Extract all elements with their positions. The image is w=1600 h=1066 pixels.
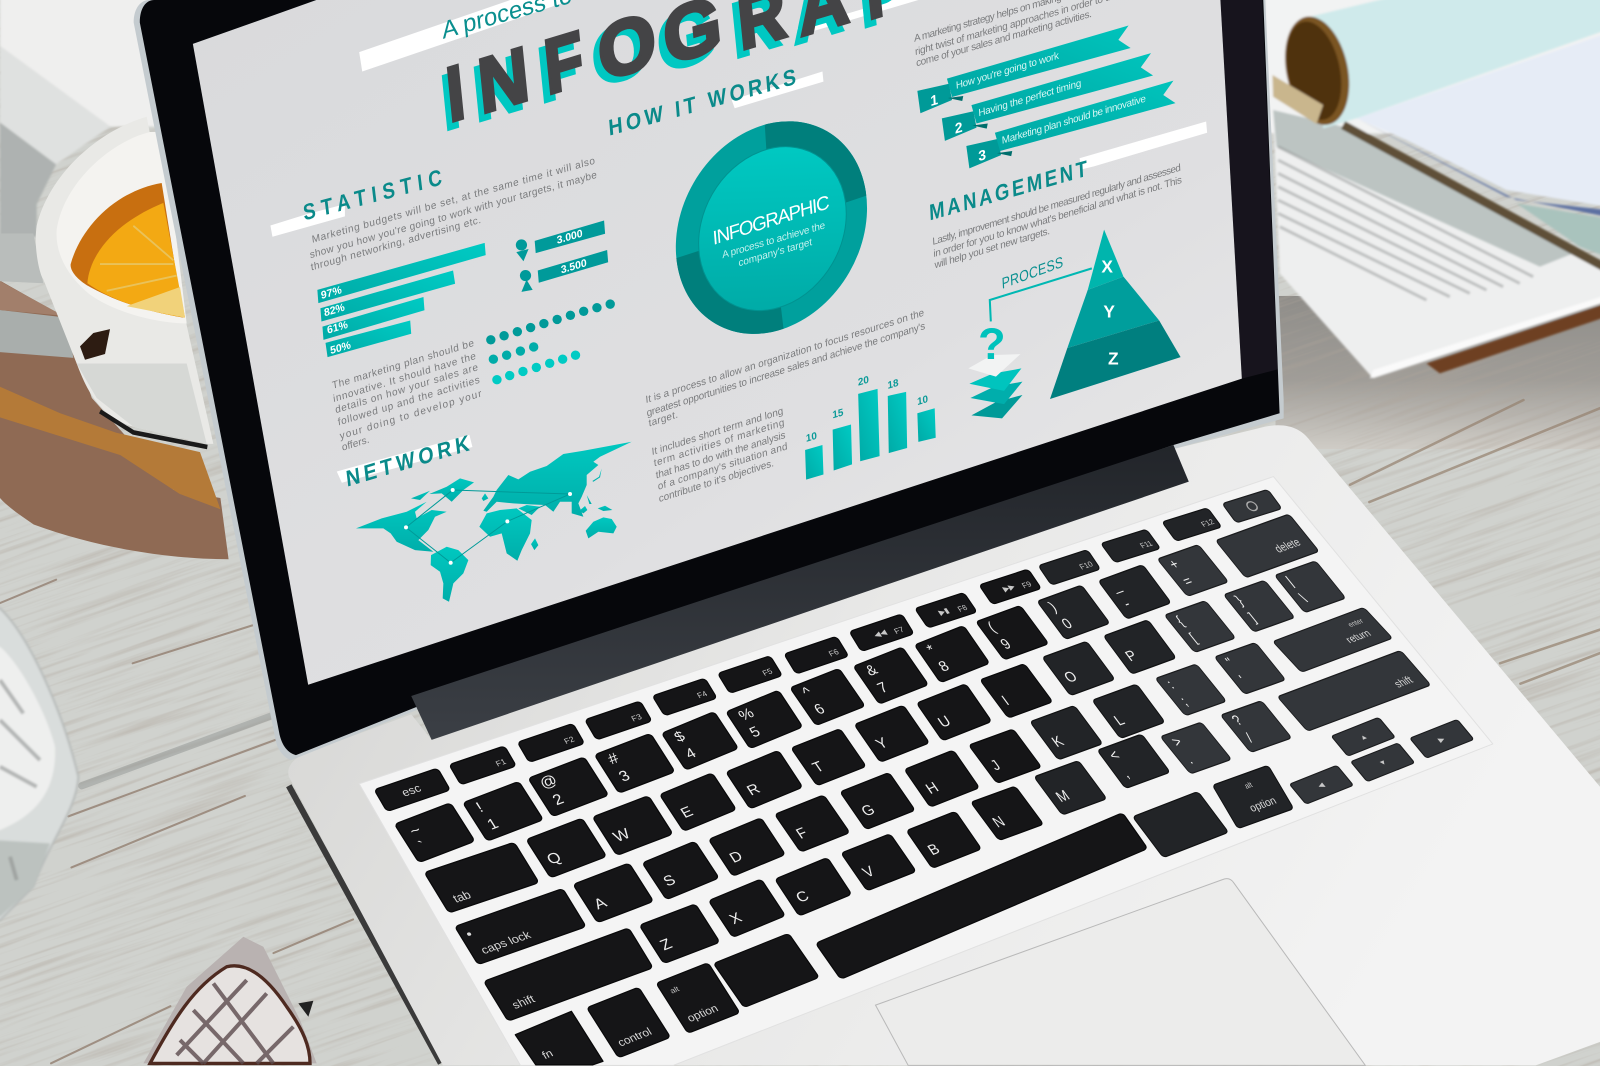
keyboard [374,489,1474,1065]
bottom key row [515,765,1294,1065]
number key row: ( [985,620,999,636]
rolled paper and notebook [1265,0,1600,378]
function key row: F4 [695,689,709,700]
ribbon 1: 1 [930,92,939,110]
lower letter key row: < [1106,747,1124,764]
qwerty key row: O [1061,669,1081,686]
number key row: 9 [998,636,1015,653]
lower letter key row: Z [657,936,676,954]
lower letter key row: ? [1229,713,1246,729]
center circle graphic [676,121,868,334]
number key row: 8 [936,659,953,675]
number key row: _ [1106,578,1125,595]
function key row: ◀◀ [872,628,889,640]
function key row: F3 [630,712,644,723]
center paragraphs: It is a process to allow an organization to focus resources on the [645,307,925,406]
center paragraphs: that has to do with the analysis [655,430,786,482]
number key row: 0 [1059,616,1076,633]
function key row: F7 [892,625,906,636]
marketing plan paragraph: offers. [341,435,370,454]
arrow keys: ▼ [1377,758,1389,767]
bar chart: 20 [858,375,870,389]
title: INFOGRAPHIC: F [534,24,581,120]
title: INFOGRAPHIC: N [469,38,528,138]
home key row: enter [1345,616,1366,629]
function key row: esc [399,781,424,799]
ribbon 3: Marketing plan should be innovative [1002,93,1147,147]
world map [356,442,632,602]
number key row: 3 [616,768,634,785]
function key row [374,489,1282,812]
cup of tea with lemon [0,117,213,447]
number key row: 1 [484,816,502,833]
management paragraph: Lastly, improvement should be measured regularly and assessed [932,162,1181,248]
number key row: 5 [747,724,764,741]
arrow keys [1289,717,1474,804]
number key row: ~ [407,822,424,840]
home key row: S [660,872,679,890]
qwerty key row: | [1283,574,1297,589]
space bar [816,813,1148,979]
qwerty key row: ] [1245,610,1260,626]
wooden spoon [0,387,220,509]
home key row: " [1223,655,1238,671]
marketing plan paragraph: followed up and the activities [337,375,480,429]
bottom key row: alt [1243,780,1254,791]
lower letter key row: , [1119,766,1133,782]
icon: male with value 3.500 [520,250,608,292]
laptop lid and bezel [134,0,1284,760]
number key row: ` [416,839,430,855]
marketing plan paragraph [332,338,483,454]
icon: question mark with stacked layers [968,318,1022,418]
pyramid X Y Z: Z [1108,348,1119,368]
center circle graphic: company's target [738,237,813,269]
home key row: H [923,780,942,798]
heading: management: MANAGEMENT [929,156,1088,226]
qwerty key row: P [1122,648,1141,665]
number key row: ^ [800,685,815,701]
bottom key row: option [685,1003,721,1025]
laptop base [288,425,1600,1065]
drinking glass [0,608,78,920]
number key row: 7 [875,680,892,697]
arrow keys: ◀ [1315,781,1327,790]
home key row: ; [1177,694,1192,709]
management paragraph: will help you set new targets. [933,226,1050,272]
percentage bars: 82% [323,301,346,319]
qwerty key row: Q [544,850,565,868]
home key row: A [591,895,610,913]
circle label: INFOGRAPHIC [712,191,830,250]
lower letter key row: . [1182,752,1197,768]
marketing plan paragraph: innovative. It should have the [333,351,477,405]
number key row: ) [1046,600,1060,615]
lower letter key row: M [1053,788,1074,806]
center paragraphs: term activities of marketing [653,417,785,469]
home key row: F [793,825,811,842]
number key row: # [605,750,622,768]
home key row [455,607,1393,965]
infographic on the screen [270,0,1207,602]
number key row: 4 [682,745,699,762]
lower letter key row: shift [1392,674,1416,690]
top right paragraph: come of your sales and marketing activities. [916,9,1092,69]
lower letter key row: shift [509,992,538,1012]
qwerty key row [424,561,1346,913]
number key row: % [735,705,757,724]
icon: female with value 3.000 [516,220,605,261]
hinge bar [411,445,1189,740]
panel: management [929,121,1207,272]
number key row: * [924,642,939,658]
title: INFOGRAPHIC: F [541,15,587,112]
bar chart: 18 [887,378,899,392]
center paragraphs: of a company's situation and [657,441,788,493]
qwerty key row: R [744,781,763,799]
heading: network: NETWORK [345,430,471,492]
process label and connector: PROCESS [1001,254,1063,293]
function key row: F11 [1138,539,1155,550]
lower letter key row: X [727,910,745,928]
statistic paragraph: through networking, advertising etc. [310,215,482,273]
title: INFOGRAPHIC: O [588,2,654,104]
panel: statistic [270,156,615,454]
bar chart [805,375,936,480]
bottom key row: fn [540,1048,555,1062]
number key row: 6 [811,701,828,718]
pyramid X Y Z: Y [1103,301,1115,321]
percentage bars: 97% [320,284,343,302]
qwerty key row: [ [1186,631,1201,646]
function key row: F9 [1020,580,1034,590]
function key row: F10 [1077,559,1095,571]
trackpad [876,879,1365,1065]
statistic paragraph: Marketing budgets will be set, at the same time it will also [311,156,596,246]
number key row: + [1165,556,1183,573]
number key row: ! [473,800,486,816]
marketing plan paragraph: The marketing plan should be [332,338,475,392]
ribbon 3 [966,81,1176,168]
heading: statistic: STATISTIC [302,165,443,226]
marketing plan paragraph: your doing to develop your [339,388,483,442]
ribbon 2: 2 [954,119,963,138]
qwerty key row: W [610,826,634,846]
home key row: K [1049,733,1068,751]
percentage bars: 61% [326,319,349,337]
home key row: : [1163,677,1178,692]
number key row: delete [1272,536,1304,556]
ribbon 3: 3 [978,147,986,165]
home key row: ' [1236,673,1250,688]
lower letter key row: V [860,864,878,881]
function key row: F12 [1199,517,1216,529]
panel: network [337,430,632,602]
bar chart: 10 [806,431,818,445]
center paragraphs [645,307,926,505]
pyramid X Y Z [1050,230,1181,399]
ribbon 2: Having the perfect timing [978,78,1082,119]
center paragraphs: target. [648,409,678,430]
lower letter key row: C [793,888,812,906]
number key row: - [1120,596,1135,612]
ribbon list [917,26,1176,168]
title: INFOGRAPHIC: I [438,57,463,147]
number key row: & [863,662,881,680]
qwerty key row: } [1232,593,1247,609]
percentage bars: 50% [330,339,352,357]
eyeglasses [143,937,317,1063]
function key row: F5 [761,667,775,678]
process label and connector [990,254,1092,321]
arrow keys: ▲ [1357,732,1370,742]
qwerty key row: Y [873,735,891,753]
management paragraph: in order for you to know what's beneficial and what is not. This [933,175,1182,260]
qwerty key row: E [678,804,696,822]
saucer with cloth [0,281,229,559]
qwerty key row: tab [450,888,474,905]
ribbon 1 [917,26,1131,113]
screen [193,0,1242,685]
number key row: @ [537,772,561,792]
center paragraphs: contribute to it's objectives. [658,458,774,505]
qwerty key row: { [1173,613,1188,629]
center circle graphic: A process to achieve the [722,220,826,261]
ribbon 1: How you're going to work [956,50,1060,92]
pyramid X Y Z: X [1101,256,1113,276]
percentage bars [317,243,486,357]
icon: male with value 3.500: 3.500 [560,257,587,276]
statistic paragraph: show you how you're going to work with your targets, it maybe [309,170,598,261]
bar chart: 10 [917,394,929,408]
bottom key row: alt [668,984,682,995]
lower letter key row: / [1242,731,1257,746]
center paragraphs: greatest opportunities to increase sales and achieve the company's [646,321,926,419]
home key row: caps lock [478,928,533,957]
bar chart: 15 [832,407,844,421]
bottom key row: option [1247,795,1279,815]
icon: female with value 3.000: 3.000 [556,227,583,247]
title: INFOGRAPHIC [442,0,892,132]
function key row: F1 [494,757,508,768]
icon: question mark with stacked layers: ? [978,318,1006,369]
lower letter key row: N [990,814,1009,831]
home key row: J [988,758,1004,774]
ribbon 2 [942,53,1153,141]
qwerty key row: U [935,714,954,731]
top-left white surface and silver object [0,0,158,237]
qwerty key row: I [999,693,1013,709]
title band and subtitle [359,0,918,71]
number key row: = [1179,573,1197,590]
lower letter key row [484,650,1431,1021]
lower letter key row: B [925,842,943,859]
number key row: $ [671,728,689,746]
function key row: F6 [827,647,841,658]
home key row: G [859,802,879,820]
number key row: 2 [550,791,567,809]
keyboard well [359,477,1493,1065]
marketing plan paragraph: details on how your sales are [335,362,479,416]
function key row: ▶▶ [1001,582,1018,593]
lower letter key row: > [1169,734,1187,751]
function key row: F2 [562,735,577,746]
function key row: F8 [956,603,969,614]
bottom key row: control [616,1026,654,1049]
number key row [394,514,1319,863]
home key row: L [1111,713,1128,729]
title: INFOGRAPHIC: I [443,49,469,139]
title: INFOGRAPHIC: N [474,30,533,130]
dot rows [486,299,615,384]
qwerty key row: T [810,759,827,776]
center paragraphs: It includes short term and long [651,406,784,458]
heading: how it works: HOW IT WORKS [608,64,797,141]
home key row: return [1344,628,1374,646]
qwerty key row: \ [1296,591,1311,606]
function key row: ▶▮ [937,606,951,617]
home key row: D [727,848,746,866]
arrow keys: ▶ [1436,735,1447,744]
